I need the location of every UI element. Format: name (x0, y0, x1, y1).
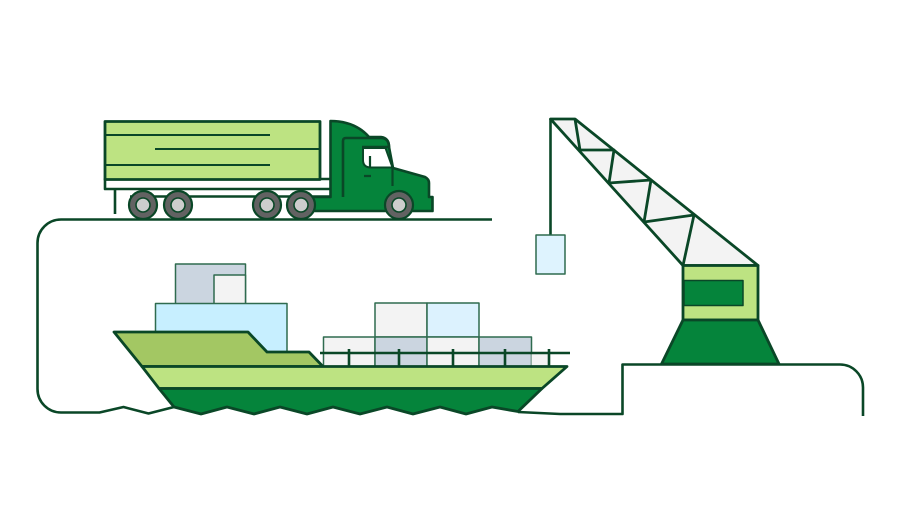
ground line: water and dock on the right (518, 364, 863, 416)
middle hull (142, 366, 567, 388)
crane cabin (683, 266, 758, 320)
cargo containers (324, 303, 548, 367)
ship superstructure (156, 264, 287, 354)
ground line: road and water on the left (38, 220, 492, 414)
crane (536, 119, 779, 364)
hoist cable (549, 119, 552, 235)
crane boom (550, 119, 758, 266)
hanging container (536, 235, 565, 274)
crane base (662, 320, 779, 364)
wheels (129, 191, 413, 219)
lower hull (159, 388, 542, 414)
ship railing (320, 349, 570, 366)
upper hull (114, 332, 323, 366)
trailer (105, 122, 331, 214)
tractor cab (305, 121, 432, 211)
truck (105, 121, 432, 219)
ship (114, 264, 570, 414)
